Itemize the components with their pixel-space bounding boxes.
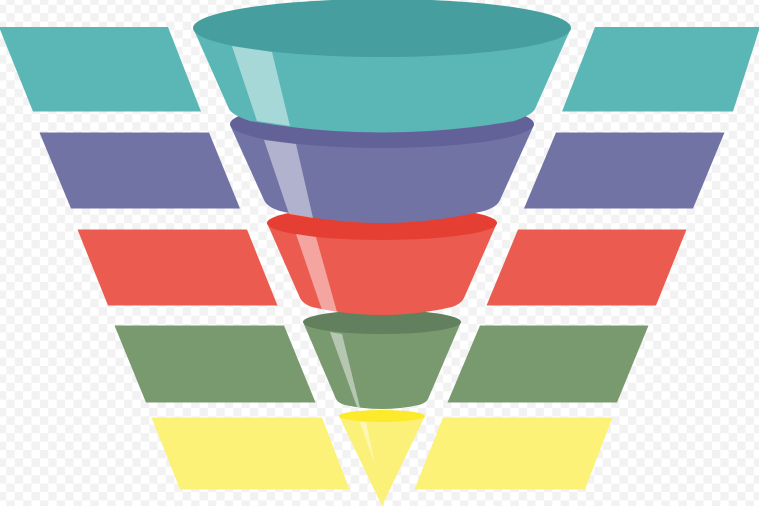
funnel tier: green	[303, 310, 461, 409]
right bar: purple	[524, 132, 724, 208]
left bar: purple	[40, 132, 240, 208]
funnel tier: purple	[230, 100, 534, 223]
left bar: yellow	[152, 418, 350, 490]
right bar: red	[486, 230, 686, 306]
funnel tier: yellow cone	[339, 410, 425, 506]
left bar: teal	[0, 27, 201, 112]
right bar: yellow	[414, 418, 612, 490]
left bar: green	[114, 326, 316, 402]
right bar: teal	[562, 27, 759, 112]
left bar: red	[78, 230, 278, 306]
funnel tier: teal	[193, 0, 571, 132]
funnel	[193, 0, 571, 506]
funnel tier: red	[267, 206, 497, 315]
right bar: green	[448, 326, 648, 402]
